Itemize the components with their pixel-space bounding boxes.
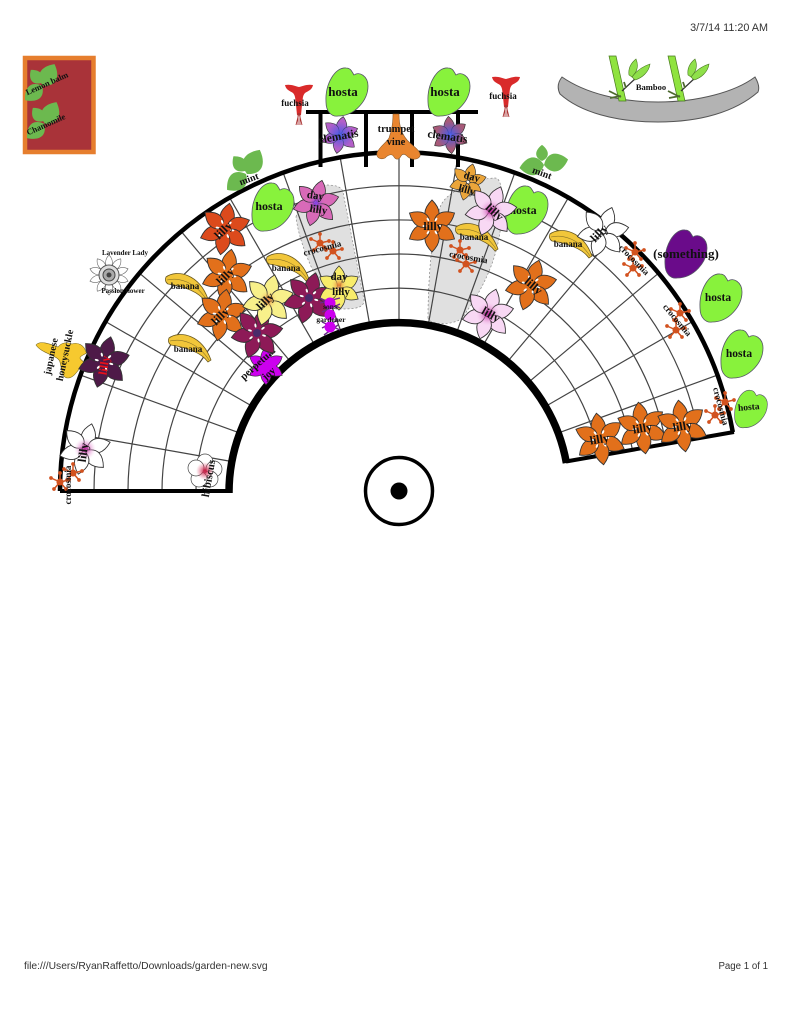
something (purple plant): (something) xyxy=(653,246,719,261)
day lilly pink xyxy=(287,174,345,232)
orange lily 1: lilly xyxy=(213,264,237,288)
hibiscus xyxy=(188,454,222,498)
orange lily right xyxy=(498,252,564,318)
hibiscus: hibiscus xyxy=(200,458,218,498)
clematis left: clematis xyxy=(318,128,360,146)
orange lily bottom 3 xyxy=(653,397,711,455)
perpetual joy: joy xyxy=(260,365,279,384)
hosta top left xyxy=(326,68,368,116)
banana 5 xyxy=(549,230,592,258)
day lilly yellow xyxy=(317,266,361,310)
yellow lily: lilly xyxy=(253,289,277,313)
banana 5: banana xyxy=(554,239,583,249)
mint left: mint xyxy=(238,171,261,188)
banana 1: banana xyxy=(171,281,200,291)
something (purple plant) xyxy=(653,230,719,278)
hosta top right xyxy=(428,68,470,116)
gardener plant xyxy=(316,298,346,335)
day lilly orange: day xyxy=(462,170,482,185)
gardener plant: gardener xyxy=(316,315,346,324)
banana 4 xyxy=(455,223,498,251)
passion flower: Lavender Lady xyxy=(89,249,148,295)
gardener plant: sons xyxy=(323,302,337,311)
hosta right 1 xyxy=(700,274,742,322)
banana 3: banana xyxy=(272,263,301,273)
hosta right 3 xyxy=(735,390,767,428)
crocosmia right bed: crocosmia xyxy=(449,249,489,265)
bamboo stem left xyxy=(609,56,650,101)
day lilly orange xyxy=(445,159,491,205)
clematis right xyxy=(427,115,470,155)
garden bed outline xyxy=(60,152,734,493)
trellis xyxy=(306,112,478,167)
yellow lily xyxy=(236,268,300,332)
crocosmia left bed: crocosmia xyxy=(302,238,343,258)
japanese honeysuckle: honeysuckle xyxy=(55,328,76,382)
banana 4: banana xyxy=(460,232,489,242)
bamboo stem right xyxy=(668,56,709,101)
trumpet vine: vine xyxy=(387,137,406,148)
banana 2: banana xyxy=(174,344,203,354)
crocosmia right 2: crocosmia xyxy=(661,302,694,339)
orange lily centre xyxy=(406,200,458,252)
day lilly orange: lilly xyxy=(457,183,477,198)
fuchsia right xyxy=(489,77,520,117)
hosta right 2: hosta xyxy=(726,348,752,360)
crocosmia right 3: crocosmia xyxy=(711,386,731,427)
day lilly yellow: day xyxy=(330,271,348,283)
label: bamboo: Bamboo xyxy=(636,82,666,92)
planter tray xyxy=(558,77,759,122)
hosta right of bed xyxy=(506,186,548,234)
fuchsia left xyxy=(281,85,313,125)
orange lily right: lilly xyxy=(522,274,545,298)
crocosmia right 3 xyxy=(705,386,735,427)
passion flower: Lavender Lady: Passion flower xyxy=(101,287,145,295)
day lilly pink: day xyxy=(306,189,325,203)
maroon lily upper xyxy=(277,266,341,330)
footer page number: Page 1 of 1 xyxy=(718,961,768,972)
orange lily 2 xyxy=(192,285,252,345)
banana 1 xyxy=(165,273,208,301)
white lily left xyxy=(53,417,117,481)
hosta left of bed xyxy=(252,183,294,231)
shaded area: right bed xyxy=(428,178,502,324)
crocosmia bottom left: crocosmia xyxy=(63,465,73,504)
crocosmia bottom left xyxy=(50,463,83,504)
dark lily with red label: lilly xyxy=(95,355,113,376)
mint right: mint xyxy=(531,165,554,182)
banana 3 xyxy=(266,253,309,281)
orange lily bottom 2: lilly xyxy=(632,419,653,437)
planter: lemon balm and chamomile xyxy=(20,58,93,152)
shaded area: left bed xyxy=(296,185,364,309)
label: lemon balm: Lemon balm xyxy=(24,70,70,97)
trumpet vine: trumpet xyxy=(378,124,415,135)
orange lily bottom 1 xyxy=(571,410,629,468)
orange lily bottom 1: lilly xyxy=(589,430,610,448)
orange lily 2: lilly xyxy=(208,304,232,328)
orange lily 1 xyxy=(197,245,257,305)
pink lily upper xyxy=(457,177,525,245)
footer file path: file:///Users/RyanRaffetto/Downloads/garden-new.svg xyxy=(24,961,268,972)
white lily right: lilly xyxy=(587,221,611,245)
crocosmia right bed xyxy=(449,240,489,272)
japanese honeysuckle: japanese xyxy=(42,337,61,377)
pink lily lower: lilly xyxy=(479,304,503,325)
crocosmia right 1: crocosmia xyxy=(617,243,652,277)
day lilly yellow: lilly xyxy=(332,286,350,298)
centre target xyxy=(366,458,432,524)
fuchsia right: fuchsia xyxy=(489,91,517,101)
orange lily centre: lilly xyxy=(423,219,443,233)
perpetual joy: perpetual xyxy=(239,346,278,383)
dark lily with red label xyxy=(72,330,136,394)
fuchsia left: fuchsia xyxy=(281,98,309,108)
red-orange lily: lilly xyxy=(211,218,235,242)
hosta right 1: hosta xyxy=(705,292,731,304)
red-orange lily xyxy=(195,199,255,259)
orange lily bottom 3: lilly xyxy=(672,417,693,435)
bamboo planter xyxy=(558,56,759,122)
clematis left xyxy=(318,113,362,157)
mint right xyxy=(518,145,570,182)
pink lily upper: lilly xyxy=(483,200,507,224)
white lily left: lilly xyxy=(75,442,91,463)
day lilly pink: lilly xyxy=(309,203,329,217)
trumpet vine xyxy=(377,114,420,159)
mint left xyxy=(221,145,269,197)
timestamp: 3/7/14 11:20 AM xyxy=(690,22,768,34)
clematis right: clematis xyxy=(427,128,469,146)
icon: lemon balm leaves xyxy=(20,60,62,106)
white lily right xyxy=(570,199,636,265)
banana 2 xyxy=(168,334,211,362)
maroon lily lower xyxy=(224,300,290,366)
hosta top left: hosta xyxy=(328,84,358,99)
orange lily bottom 2 xyxy=(613,399,671,457)
japanese honeysuckle xyxy=(36,328,86,382)
pink lily lower xyxy=(455,281,521,347)
icon: chamomile leaves xyxy=(22,98,64,144)
hosta left of bed: hosta xyxy=(255,199,283,213)
hosta right of bed: hosta xyxy=(509,203,537,217)
hosta right 2 xyxy=(721,330,763,378)
hosta top right: hosta xyxy=(430,84,460,99)
garden bed grid xyxy=(65,152,718,491)
label: chamomile: Chamomile xyxy=(25,112,67,137)
passion flower: Lavender Lady: Lavender Lady xyxy=(102,249,148,257)
hosta right 3: hosta xyxy=(738,402,760,414)
